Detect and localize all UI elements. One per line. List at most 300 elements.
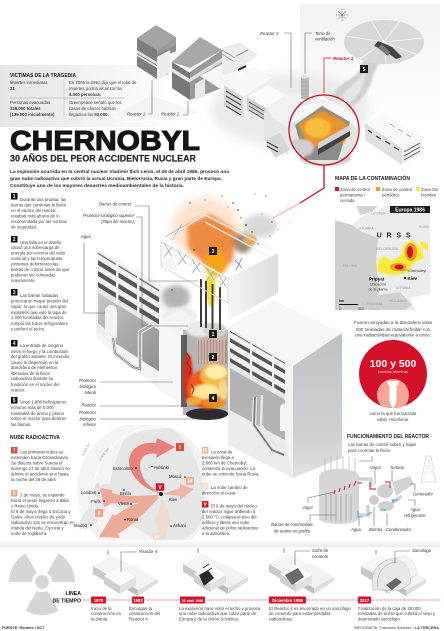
map title tag: Europa 1986 [395,208,425,214]
label: cement box: Cofre de [312,548,329,553]
intro text: gran nube radioactiva que cubrió la actual Ucrania, Bielorrusia, Rusia y gran parte de Europa. [10,176,222,182]
step 3 text: Las barras trabadas [20,293,58,298]
illustration: cutaway left wing [96,248,182,405]
timeline 2017: Finalización de la caja de 20.000 [358,606,421,611]
text: victims figures: Personas evacuadas [10,100,50,105]
callout: 100 to 500 atomic bombs [359,340,427,411]
label: reactor 4: Reactor 4 [333,56,354,61]
map legend [335,187,439,203]
cloud step I: la noche del 28 de abril. [11,477,57,482]
step 1 text: 1 [13,194,16,200]
step 4 text [11,340,70,392]
cloud step IV: dirección al cesar. [202,490,236,496]
step 2 text: Una falla en el diseño [20,240,62,245]
label: ventilation tower: Torre de [315,31,331,36]
step 4 text: reactor. [11,388,25,392]
timeline 1970: 1970 [94,598,104,603]
core fire [183,352,228,409]
explosion cloud above reactor [171,198,277,307]
label: reactor 2: Reactor 2 [161,112,180,116]
panel: radioactive cloud [10,425,260,540]
steam path [334,481,390,494]
step 3 text: 3 [13,290,16,296]
step 3 text: y perforó el techo. [11,326,45,332]
heading: contamination map: MAPA DE LA CONTAMINACIÓN [335,174,410,182]
timeline December 1986: El Reactor 4 es encerrado en un sarcófago [269,606,352,611]
cloud step I: Las primeras nubes se [20,450,64,454]
map scale [339,299,364,311]
label: upper biological shield [83,213,188,326]
city labels: Viena [118,501,129,506]
step 2 text: nuevamente. [11,278,36,283]
number badges on the reactor: 3 [212,249,215,255]
number badge 5: 5 [363,67,366,73]
map legend: Zona de control [340,187,370,192]
label: lateral biological shield [79,378,173,395]
text: victims figures [10,80,137,117]
step 2 text: 2 [13,237,16,243]
map legend: periódico [382,192,400,197]
text: hiroshima comparison: como la que fue lanzada [370,411,417,416]
cloud step II: hacia el oeste llegando a Italia [11,498,69,503]
icon: radiation trefoil [9,553,75,615]
step 4 text: 4 [13,341,16,347]
pipes right wing [254,395,284,455]
label: ventilation tower: ventilación [315,36,335,42]
cloud step III [202,447,260,476]
city labels: Berlín [120,491,132,496]
text: victims figures: muertes podría alcanzar las [69,86,122,91]
diagram labels: Bomba [369,527,383,532]
text: reactor intro: para controlar la fisión [348,448,391,453]
text: fissile material: 200 toneladas de material fisible con [356,327,431,332]
label: ventilation tower [305,31,335,74]
city labels [74,465,187,528]
map place labels [343,212,430,306]
callout: 100 to 500 atomic bombs: bombas atómicas [378,370,408,374]
city labels: Helsinki [154,465,169,470]
label: reactor [81,402,202,408]
step 5 text: echaron más de 5.000 [11,405,54,410]
pipes [359,479,371,487]
text: victims figures: 4.000 personas. [69,92,101,97]
text: victims figures: En 2005 la ONU dijo que el total de [69,80,137,85]
cloud step III: comienza la evacuación. La [202,466,256,471]
city labels: París [91,499,101,504]
city labels: Moscú [169,474,182,479]
map place labels: BIELORRUSIA [376,247,399,251]
step 3 text: 1.000 toneladas del reactor, [11,315,64,320]
number badges on the reactor [209,247,217,402]
label: reactor 3 [260,31,291,88]
label: lower biological shield [79,410,197,427]
timeline 1970: Inicio de la [91,606,112,611]
timeline December 1986: Diciembre 1986 [272,598,304,603]
control rods [201,279,220,330]
map badges [95,443,194,541]
connector line from callout to explosion [273,165,324,218]
cloud step II: El 6 de mayo, llega a Escocia y [11,509,72,514]
label: reactor 3: Reactor 3 [260,31,279,36]
label: reactor 1 [127,80,152,116]
callout: 100 to 500 atomic bombs: 100 y 500 [370,358,417,370]
map place labels: UCRANIA [396,286,411,290]
map badges: I [179,445,181,451]
diagram labels: Generador [413,492,434,496]
diagram labels: Turbina [390,465,405,470]
map scale: 300 [358,307,364,311]
cloud step IV: La nube cambió de [211,485,248,490]
illustration: cutaway right wing [228,300,342,478]
city labels: Estocolmo [113,466,133,471]
cloud map [74,425,204,540]
step 3 text [11,289,68,332]
cloud step III: nube se extiende hacia Rusia. [202,472,260,476]
timeline 1970: la planta. [91,616,108,622]
timeline 1983: 1983 [133,598,143,603]
step 3 text: vapor, lo que causó una gran [11,304,67,309]
map badges: V [158,485,162,491]
infographic credit: INFOGRAFÍA: Francisco Soberón • LA TERCERA [354,626,439,630]
label: sarcophagus [395,548,432,563]
cloud step V: V [204,502,208,508]
map place labels: Pripyat [369,276,385,282]
step 1 text: Durante una prueba, las [20,197,66,202]
coolant pipes [113,325,152,369]
cloud step V: adicional de polvo radioactivo [202,526,259,530]
timeline 1970 [91,596,122,622]
step 1 text: de seguridad. [11,225,37,230]
cloud step IV [202,483,248,496]
water path [358,500,398,517]
timeline heading [52,591,81,604]
label: upper biological shield: Protector biológico superior [83,213,135,218]
label: upper biological shield: (Tapa del reactor) [101,219,135,224]
cloud step I: admite el accidente sino hasta [11,472,69,476]
step 5 text: Unos 1.800 helicópteros [20,400,66,404]
rubble around reactor 4 [299,150,351,166]
label: reactor 2 [161,101,188,116]
arrow I [129,438,175,493]
arrow III [163,484,194,500]
city labels: Roma [127,517,139,522]
cloud step V: 2.500 °C, colapsa el piso del [202,514,257,520]
intro text: Constituye uno de los mayores desastres medioambientales de la historia. [10,183,184,189]
map place labels: LETONIA [371,212,386,216]
step 2 text: energía por encima del valor [11,250,66,256]
text: fissile material: una radiactividad equivalente a entre: [355,332,431,338]
cloud map: 3.500 km [81,442,91,457]
timeline 1983: Reactor 4. [129,616,149,622]
timeline December 1986 [269,596,352,622]
label: lower biological shield: Protector [79,410,97,415]
background panel: top right sky [300,4,440,124]
diagram labels: refrigerante [404,513,426,518]
cloud step III: III [203,448,208,454]
cooling tower [421,456,436,482]
timeline building: December 1986 [269,548,334,594]
step 4 text: La entrada de oxígeno [20,343,64,348]
label: control rods [99,202,198,281]
cloud step I: Se detecta sobre Suecia el [11,460,62,466]
intro text [10,169,229,189]
timeline 2017: toneladas de acero que cubrirá el viejo y [358,611,436,616]
text: victims figures: 336.000 totales [10,106,41,111]
timeline 26 April 1986 [179,596,261,622]
text: hiroshima comparison: sobre Hiroshima. [377,417,409,422]
panel: victims of the tragedy [0,65,180,127]
map badges: IV [155,535,160,541]
timeline line [83,599,440,601]
step 5 text: toneladas de arena y plomo [11,411,65,416]
illustration: reactor shaft and core [181,321,228,420]
map [335,206,430,311]
step 2 text: nominal y las temperaturas [11,256,63,261]
cloud step I [11,447,70,482]
map badges: III [188,479,193,485]
map legend: permanente / [340,192,366,197]
tank right wing [280,404,292,431]
label: reactor 4 [324,56,354,93]
text: victims figures: llegado a los 93.000. [69,112,109,117]
step 3 text: provocaron mayor presión del [11,298,68,304]
upper wall and steel truss [161,215,278,321]
label: water [80,234,105,313]
illustration: reactor 3 wing [222,42,320,158]
arrow II north [100,488,160,507]
map place labels: URSS [377,232,415,240]
cloud step I: domingo 27 de abril. Moscú no [11,466,70,471]
diagram labels: Agua [409,507,421,512]
map legend: Nombre [421,192,437,197]
timeline 2017: 2017 [360,598,370,603]
upper debris white [186,321,214,337]
cloud step II: Gales. Altos niveles de yodo [11,514,66,520]
text: fissile material: Fueron arrojadas a la atmósfera unas [354,320,432,325]
label: control rods: Barras de control [99,202,132,206]
label: lateral biological shield: biológico [79,384,97,389]
timeline building: 2017 sarcophagus [361,550,426,596]
step 2 text: pudieran ser colocadas [11,272,55,278]
intro text: La explosión ocurrida en la central nuclear Vladimir Ilich Lenin, el 26 de abril 1986, provocó una [10,169,229,175]
text: victims figures: Greenpeace señaló que los [69,100,122,105]
city labels: Londres [81,490,96,495]
cloud step II: II [13,491,16,497]
timeline building: 26 April 1986 [183,548,248,594]
diagram labels: de uranio en grafito [274,528,311,534]
label: cement box: cemento [312,554,329,559]
step 3 text: explosión que voló la tapa de [11,310,67,315]
title: CHERNOBYL [10,125,200,156]
timeline 1983: construcción del [129,611,160,616]
timeline 1983 [129,596,160,622]
text: victims figures: 31 [10,86,15,91]
text: fissile material [354,320,432,338]
step 4 text: avivó el fuego y la combustión [11,349,69,354]
arrow II south [99,497,159,538]
diagram labels: Barras de combustible [271,522,313,527]
step 1 text [11,193,67,230]
cloud step V: edificio y libera una nube [202,520,250,525]
cloud step II: y Reino Unido. [11,504,39,508]
timeline December 1986: radioactivas. [269,616,293,622]
cloud step II: 2 de mayo, se expande [20,492,65,498]
map place labels: MOLDAVIA [390,299,407,303]
cloud step IV: IV [203,484,208,490]
timeline 26 April 1986: Europa y de la Unión Soviética. [179,616,239,622]
timeline 26 April 1986: 26 abril 1986 [182,599,203,603]
cloud step I: extienden hacia Escandinavia. [11,455,69,460]
step 5 text: las llamas. [11,422,31,427]
text: reactor intro [348,442,417,453]
water tank [105,305,117,339]
illustration: long building right [365,114,422,165]
label: lower biological shield: inferior [83,422,97,427]
cloud map: 2.500 km [98,447,110,462]
label: lower biological shield: biológico [79,416,97,422]
label: water: Agua [80,234,91,239]
timeline 26 April 1986: una nube radioactiva que cubre parte de [179,611,257,616]
cloud step V: El 9 de mayo del núcleo [211,504,257,508]
rods [325,454,355,472]
step 1 text: estaban más afuera de lo [11,214,60,218]
step 4 text: atmósfera de elementos [11,365,57,370]
map place labels: de la planta [368,288,388,292]
text: victims figures: casos de cáncer habrían [69,106,117,111]
heading: radioactive cloud: NUBE RADIOACTIVA [10,435,60,441]
diagram labels [271,456,434,534]
fallout zones [378,240,428,275]
number badges on the reactor: 4 [212,396,215,402]
step 2 text [11,236,70,283]
cloud step II: Irlanda del Norte, Escocia y [11,526,64,530]
ground shadow behind the plant [210,72,370,148]
cloud step III: exclusión llega a [202,455,234,460]
step 4 text: radioactiva durante su [11,376,54,381]
heading: victims: VICTIMAS DE LA TRAGEDIA [10,73,76,79]
cloud step I: I [14,448,16,454]
label: cement box [295,548,329,565]
number badge 5 [360,65,368,73]
map place labels: Chernobyl [408,268,426,273]
map legend: cerrada [340,198,355,203]
panel: contamination map [335,174,439,311]
step 4 text: fundición en el núcleo del [11,382,60,387]
cloud step II [11,490,75,536]
timeline 2017 [358,596,436,622]
debris particles [171,194,290,291]
timeline 2017: deteriorado sarcófago. [358,616,401,622]
map place labels: RUSIA [419,225,430,229]
step 2 text: causó una sobrecarga de [11,245,60,250]
timeline 1983: Encargan la [129,606,153,611]
map place labels: LITUANIA [359,226,374,230]
text: victims figures: Muertes inmediatas [10,80,48,85]
cloud step V [202,501,259,536]
number badges on the reactor: 1 [212,332,215,338]
smoke plume from reactor 4 [330,50,384,108]
circle callout: reactor 4 explosion [286,95,359,165]
text: reactor intro: Las barras de control suben y bajan [348,442,417,447]
label: lateral biological shield: Protector [79,378,97,383]
cloud step V: del reactor sigue ardiendo a [202,509,256,514]
timeline building: 1983 with reactor 4 label [93,549,158,596]
step 5 text: 5 [13,398,16,404]
turbine and generator [377,484,393,498]
diagram labels: Vapor [302,505,314,510]
source credit: FUENTE: Reuters / NCT [2,626,45,630]
city labels: Ankara [173,523,187,528]
diagram: reactor [319,454,436,524]
diagram labels: Vapor [370,465,382,470]
label: sarcophagus: Sarcófago [412,548,432,553]
label: reactor: Reactor [81,402,97,408]
diagram labels: Agua [350,527,361,532]
city labels: Kiev [169,497,178,502]
step 3 text: rompió las tubos refrigerantes [11,321,68,326]
icon: rotor blade [336,9,348,21]
step 1 text: barras que controlan la fisión [11,202,67,207]
diagram labels: Condensador [386,527,412,532]
step 4 text: causó la dispersión en la [11,360,59,365]
map place labels: POLONIA [343,264,358,268]
step 4 text: del grafito aislante. El incendio [11,354,70,359]
arrow IV [155,498,172,541]
label: lateral biological shield: lateral [85,390,97,395]
text: hiroshima comparison [370,411,417,422]
map scale: km [339,299,344,303]
timeline 26 April 1986: La explosión hace volar el techo y provoca [179,606,261,611]
timeline building: 1983 with reactor 4 label: Reactor 4 [139,549,158,554]
cloud step II: radioactivo 131 se encuentran en [11,520,75,525]
timeline heading: DE TIEMPO [52,598,81,604]
step 1 text: en el núcleo del reactor, [11,208,57,213]
cloud step III: 2.800 km de Chernobyl, [202,460,248,466]
subtitle: 30 AÑOS DEL PEOR ACCIDENTE NUCLEAR [10,152,196,164]
text: victims figures: (135.000 inicialmente) [10,112,55,117]
cloud step II: norte de Inglaterra. [11,531,47,536]
timeline heading: LINEA [65,591,81,597]
timeline 1970: construcción en [91,611,122,616]
timeline December 1986: de cemento para evitar pérdidas [269,611,331,616]
step 5 text [11,397,67,427]
panel: how the reactor works [271,434,436,534]
vessel [319,469,359,524]
step 1 text: recomendado por las normas [11,219,67,224]
map badges: II [98,511,101,517]
step 5 text: sobre el reactor para detener [11,416,67,421]
heading: how the reactor works: FUNCIONAMIENTO DEL REACTOR [347,434,429,440]
map legend: Zona Sin [421,187,439,192]
map scale: 0 [339,307,341,311]
cloud step III: La zona de [211,450,233,454]
icon: bomb [387,381,399,408]
fuel drum [197,335,227,364]
city labels: Madrid [74,523,87,528]
smoke beside control rods [162,285,197,332]
map place labels: Kiev [408,276,418,281]
illustration: ventilation tower [301,75,309,99]
label: reactor 1: Reactor 1 [127,112,145,116]
map legend: Zona de control [382,187,412,192]
cloud step V: a la atmósfera. [202,531,230,536]
divider band above timeline [0,540,440,547]
map place labels: Ubicación [370,282,386,286]
icon: spotlight disc with helicopter [344,20,424,64]
map place labels: RUMANIA [367,302,383,306]
illustration: reactor 1 and 2 buildings [115,25,240,120]
step 2 text: barras de control antes de que [11,267,70,272]
